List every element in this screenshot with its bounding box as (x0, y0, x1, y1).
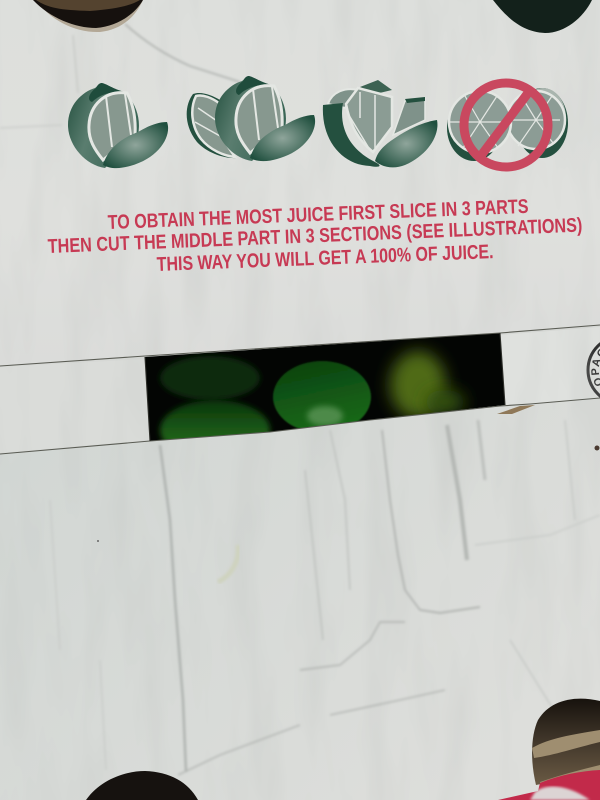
top stem piece (360, 80, 392, 94)
round stamp (586, 342, 600, 398)
window showing limes (146, 334, 504, 440)
top flap (0, 0, 600, 366)
corner hole: top left (33, 0, 143, 32)
line three: THIS WAY YOU WILL GET A 100% OF JUICE. (156, 241, 494, 276)
torn cardboard strip (497, 405, 535, 414)
icon: crossed-out wrong cut (447, 83, 568, 167)
stains and specks (97, 446, 600, 582)
back left piece (328, 89, 358, 108)
icon: whole lime cut once (68, 83, 168, 168)
right half (507, 88, 568, 158)
flap edges (0, 325, 600, 454)
right section (393, 98, 425, 135)
middle right flap with round stamp (501, 328, 600, 404)
icon: lime with side slice removed (187, 76, 315, 161)
lime body and wedge (215, 76, 315, 161)
left half (447, 91, 511, 161)
corner hole: bottom left (86, 771, 198, 800)
middle left flap (0, 359, 150, 453)
side slice (187, 93, 237, 158)
prohibition sign (464, 83, 548, 167)
centre face (346, 88, 392, 152)
lime: lower left (156, 398, 274, 440)
bottom flap (0, 398, 600, 800)
icon: lime cut in three sections (323, 80, 437, 167)
lime: upper left in shadow (160, 356, 260, 400)
left rind (323, 103, 380, 167)
instruction text (47, 196, 583, 276)
lime: centre (273, 361, 371, 433)
corner hole: top right (493, 0, 592, 33)
lime: right yellow-green (390, 351, 465, 419)
corner hole: bottom right (498, 699, 600, 800)
wedge (375, 120, 437, 167)
